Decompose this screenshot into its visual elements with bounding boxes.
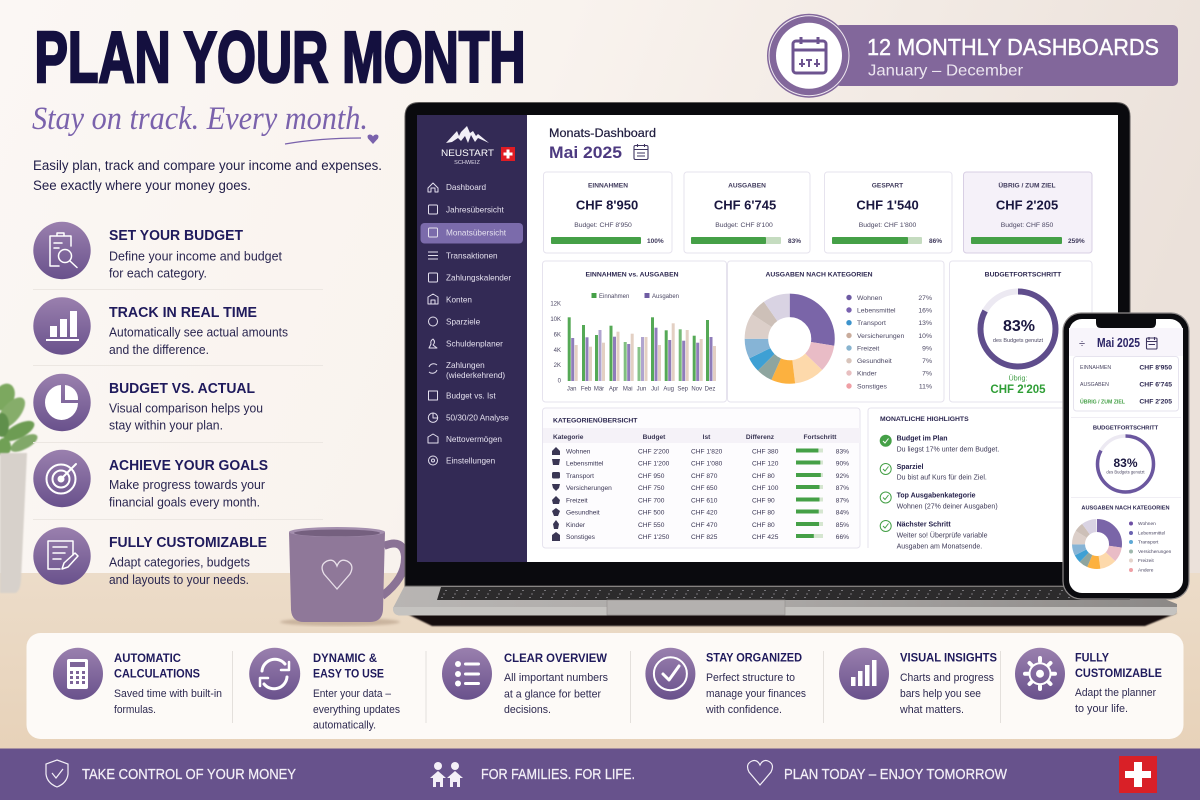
- nav items: Einstellungen: [446, 456, 496, 466]
- benefit: visual insights: Charts and progress: [900, 672, 994, 684]
- highlight: budget im plan: [880, 435, 999, 454]
- feature: budget vs actual: Visual comparison helps you: [109, 402, 263, 416]
- table rows: Transport: [566, 473, 594, 480]
- table rows: CHF 870: [691, 473, 718, 480]
- KPI card: Uebrig: ÜBRIG / ZUM ZIEL: [998, 180, 1056, 190]
- table rows: Freizeit: [566, 498, 588, 504]
- table header: [543, 428, 860, 443]
- nav items: Monatsübersicht: [446, 229, 507, 238]
- nav items: Schuldenplaner: [446, 340, 503, 348]
- logo: [441, 126, 515, 166]
- highlight: budget im plan: Du liegst 17% unter dem Budget.: [897, 446, 999, 454]
- legend: [592, 293, 679, 300]
- donut legend: 7%: [922, 358, 932, 365]
- icon: heart: [748, 760, 772, 785]
- feature: set your budget: [33, 222, 283, 280]
- KPI card: Einnahmen: EINNAHMEN: [588, 182, 628, 190]
- sidebar: [417, 115, 527, 562]
- footer band: [0, 748, 1200, 800]
- phone budget ring: des Budgets genutzt: [1106, 470, 1145, 474]
- benefit: dynamic and easy to use: [249, 648, 400, 732]
- feature: budget vs actual: [33, 374, 263, 432]
- panel: monthly highlights: [868, 408, 1065, 550]
- highlight: sparziel: Du bist auf Kurs für dein Ziel.: [897, 474, 987, 482]
- table rows: CHF 550: [638, 522, 665, 529]
- axis labels: 6K: [554, 332, 561, 338]
- divider: [630, 651, 631, 723]
- panel: category table: KATEGORIENÜBERSICHT: [553, 416, 638, 424]
- intro text: [33, 158, 382, 193]
- mug: [280, 527, 405, 626]
- benefit: dynamic and easy to use: DYNAMIC &: [313, 651, 377, 665]
- phone donut legend: Lebensmittel: [1138, 531, 1165, 537]
- benefit: clear overview: [442, 648, 608, 716]
- bottom benefits panel: [26, 633, 1184, 739]
- phone donut legend: Wohnen: [1138, 521, 1156, 527]
- axis labels: 10K: [550, 317, 561, 323]
- highlight: top ausgabenkategorie: [880, 492, 998, 510]
- KPI card: Ausgaben: AUSGABEN: [728, 182, 766, 190]
- table rows: 87%: [836, 485, 849, 492]
- KPI card: Ausgaben: 83%: [788, 238, 801, 245]
- legend: Ausgaben: [652, 294, 679, 300]
- benefit: fully customizable: FULLY: [1075, 650, 1109, 664]
- benefit: clear overview: CLEAR OVERVIEW: [504, 651, 608, 665]
- benefit: fully customizable: [1015, 648, 1162, 715]
- panel: bar chart income vs expenses: [542, 261, 726, 402]
- phone header: [1069, 328, 1183, 356]
- benefit: stay organized: manage your finances: [706, 688, 806, 700]
- phone donut legend: Transport: [1138, 540, 1159, 546]
- donut legend: 11%: [919, 384, 932, 390]
- nav items: (wiederkehrend): [446, 371, 505, 380]
- feature: set your budget: for each category.: [109, 266, 207, 280]
- feature: achieve your goals: ACHIEVE YOUR GOALS: [109, 458, 268, 474]
- table rows: Sonstiges: [566, 534, 596, 541]
- table rows: 87%: [836, 498, 849, 504]
- table header: Fortschritt: [804, 434, 837, 441]
- highlight: naechster schritt: Ausgaben am Monatsende.: [897, 544, 982, 550]
- table rows: CHF 1'820: [691, 448, 723, 456]
- phone: [1063, 313, 1189, 599]
- panel: budget progress ring: Übrig:: [1009, 374, 1027, 382]
- table rows: Kinder: [566, 522, 586, 529]
- feature: achieve your goals: Make progress towards your: [109, 478, 265, 492]
- divider: [33, 365, 323, 366]
- donut legend: Wohnen: [857, 295, 882, 302]
- panel: expenses by category donut: [728, 261, 944, 402]
- donut legend: Transport: [857, 320, 886, 327]
- donut legend: Gesundheit: [857, 358, 892, 365]
- feature: budget vs actual: BUDGET VS. ACTUAL: [109, 381, 255, 397]
- benefit: clear overview: All important numbers: [504, 672, 608, 684]
- bars: [568, 317, 716, 381]
- phone summary card: [1074, 356, 1178, 411]
- donut legend: Kinder: [857, 370, 877, 378]
- highlight: top ausgabenkategorie: Top Ausgabenkategorie: [897, 492, 976, 500]
- highlight: sparziel: Sparziel: [897, 464, 923, 471]
- icon: children: [430, 762, 463, 787]
- divider: [33, 442, 323, 443]
- icon: swiss flag: [1119, 756, 1157, 793]
- feature: budget vs actual: stay within your plan.: [109, 418, 223, 432]
- footer text: families: FOR FAMILIES. FOR LIFE.: [481, 767, 635, 783]
- divider: [33, 519, 323, 520]
- phone donut legend: Versicherungen: [1138, 549, 1172, 555]
- donut legend: 13%: [918, 320, 932, 327]
- icon: calendar: [793, 37, 826, 73]
- donut chart: [756, 305, 823, 372]
- KPI card: Einnahmen: Budget: CHF 8'950: [574, 222, 632, 229]
- axis labels: Apr: [609, 386, 618, 392]
- nav items: Konten: [446, 296, 472, 304]
- table rows: CHF 825: [691, 534, 718, 541]
- benefit: dynamic and easy to use: automatically.: [313, 720, 376, 732]
- axis labels: Mär: [594, 386, 604, 392]
- benefit: clear overview: at a glance for better: [504, 688, 601, 700]
- table header: Ist: [703, 434, 711, 441]
- table rows: Gesundheit: [566, 510, 600, 516]
- table rows: CHF 610: [691, 498, 718, 504]
- KPI card: Ausgaben: Budget: CHF 8'100: [715, 222, 773, 229]
- axis labels: Mai: [623, 386, 633, 392]
- phone donut legend: [1129, 521, 1172, 574]
- feature: fully customizable: [33, 527, 267, 587]
- intro text: See exactly where your money goes.: [33, 178, 251, 193]
- nav items: Budget vs. Ist: [446, 392, 496, 400]
- KPI card: Einnahmen: [544, 172, 672, 253]
- icon: shield: [46, 760, 68, 787]
- title: PLAN YOUR MONTH: [34, 18, 526, 98]
- logo: SCHWEIZ: [454, 160, 480, 166]
- divider: [33, 289, 323, 290]
- highlight: naechster schritt: Weiter so! Überprüfe variable: [897, 532, 988, 540]
- panel: budget progress ring: des Budgets genutzt: [993, 338, 1044, 344]
- panel: budget progress ring: CHF 2'205: [990, 384, 1046, 396]
- KPI card: Gespart: 86%: [929, 238, 942, 245]
- panel: monthly highlights: MONATLICHE HIGHLIGHTS: [880, 416, 969, 423]
- benefit: automatic calculations: CALCULATIONS: [114, 666, 200, 680]
- donut legend: 7%: [922, 370, 932, 378]
- table rows: CHF 1'250: [638, 534, 670, 541]
- table rows: Lebensmittel: [566, 460, 604, 468]
- feature: track in real time: TRACK IN REAL TIME: [109, 305, 257, 321]
- donut legend: 27%: [918, 295, 932, 302]
- axis labels: 12K: [550, 302, 561, 308]
- table rows: CHF 425: [752, 534, 779, 541]
- feature: fully customizable: FULLY CUSTOMIZABLE: [109, 535, 267, 551]
- table rows: CHF 1'080: [691, 460, 723, 468]
- phone category donut: AUSGABEN NACH KATEGORIEN: [1081, 506, 1170, 512]
- benefit: fully customizable: to your life.: [1075, 703, 1128, 715]
- badge: 12 monthly dashboards: 12 MONTHLY DASHBOARDS: [867, 34, 1159, 60]
- benefit: visual insights: VISUAL INSIGHTS: [900, 650, 997, 664]
- KPI card: Gespart: [824, 172, 952, 253]
- intro text: Easily plan, track and compare your income and expenses.: [33, 158, 382, 173]
- icon: small calendar: [634, 144, 648, 160]
- table rows: 66%: [836, 534, 849, 541]
- feature list: [33, 222, 323, 587]
- table rows: CHF 750: [638, 485, 665, 492]
- benefit: visual insights: [839, 648, 997, 716]
- feature: fully customizable: and layouts to your needs.: [109, 573, 249, 587]
- KPI card: Uebrig: Budget: CHF 850: [1001, 222, 1053, 229]
- benefit: visual insights: what matters.: [899, 704, 964, 716]
- benefit: automatic calculations: [53, 648, 222, 716]
- dashboard heading: Mai 2025: [549, 143, 622, 162]
- KPI card: Gespart: GESPART: [872, 182, 903, 190]
- phone budget ring: 83%: [1113, 456, 1138, 470]
- table rows: 85%: [836, 522, 849, 529]
- nav items: Transaktionen: [446, 252, 498, 260]
- phone summary card: EINNAHMEN: [1080, 365, 1111, 371]
- phone donut legend: Freizeit: [1138, 558, 1154, 564]
- screen: [417, 115, 1118, 562]
- nav items: Dashboard: [446, 183, 487, 192]
- KPI card: Ausgaben: CHF 6'745: [714, 198, 776, 212]
- donut legend: 10%: [918, 333, 932, 340]
- panel: expenses by category donut: AUSGABEN NACH KATEGORIEN: [765, 272, 873, 278]
- icon: heart on mug: [322, 560, 352, 589]
- axis labels: 2K: [554, 363, 561, 369]
- panel: budget progress ring: [950, 261, 1092, 402]
- benefit: visual insights: bars help you see: [900, 688, 981, 700]
- feature: set your budget: Define your income and budget: [109, 250, 283, 264]
- active nav highlight: [420, 223, 523, 244]
- table header: Differenz: [746, 434, 775, 441]
- KPI card: Uebrig: CHF 2'205: [996, 198, 1058, 212]
- table header: Kategorie: [553, 434, 584, 441]
- phone header: ÷: [1079, 338, 1085, 350]
- feature: fully customizable: Adapt categories, budgets: [109, 556, 250, 570]
- KPI card: Uebrig: [964, 172, 1092, 253]
- benefit: stay organized: with confidence.: [705, 704, 782, 716]
- table rows: CHF 650: [691, 485, 718, 492]
- highlight: sparziel: [880, 464, 987, 482]
- donut legend: 16%: [918, 308, 932, 314]
- table header: Budget: [643, 434, 666, 441]
- subtitle script with underline and heart: Stay on track. Every month.: [32, 101, 368, 137]
- table rows: CHF 100: [752, 485, 779, 492]
- axis labels: Aug: [663, 386, 674, 392]
- table rows: 90%: [836, 460, 849, 468]
- phone summary card: CHF 6'745: [1139, 382, 1172, 388]
- laptop lid: [405, 102, 1130, 586]
- phone budget ring: [1071, 417, 1181, 492]
- nav items: 50/30/20 Analyse: [446, 414, 509, 423]
- dashboard heading: Monats-Dashboard: [549, 128, 656, 140]
- badge: 12 monthly dashboards: January – December: [868, 62, 1024, 80]
- divider: [1000, 651, 1001, 723]
- table rows: CHF 380: [752, 448, 779, 456]
- benefit: automatic calculations: AUTOMATIC: [114, 651, 181, 665]
- divider: [232, 651, 233, 723]
- dashboard heading: [549, 128, 656, 162]
- axis labels: Feb: [581, 386, 592, 392]
- KPI card: Gespart: Budget: CHF 1'800: [859, 222, 917, 229]
- donut legend: Versicherungen: [857, 333, 904, 340]
- panel: budget progress ring: 83%: [1003, 318, 1035, 335]
- table rows: CHF 90: [752, 498, 775, 504]
- donut legend: Lebensmittel: [857, 308, 896, 314]
- highlight: top ausgabenkategorie: Wohnen (27% deiner Ausgaben): [897, 504, 998, 510]
- panel: category table: [542, 408, 860, 548]
- feature: achieve your goals: financial goals every month.: [109, 496, 260, 510]
- feature: track in real time: and the difference.: [109, 343, 209, 357]
- table rows: [552, 447, 849, 541]
- laptop base: [393, 585, 1177, 626]
- donut legend: [846, 295, 932, 390]
- nav items: [428, 183, 511, 466]
- KPI card: Ausgaben: [684, 172, 810, 253]
- panel: bar chart income vs expenses: EINNAHMEN vs. AUSGABEN: [585, 272, 679, 278]
- highlight: naechster schritt: [880, 520, 988, 550]
- table rows: CHF 80: [752, 522, 775, 529]
- benefit: fully customizable: CUSTOMIZABLE: [1075, 666, 1162, 680]
- axis labels: Jul: [651, 386, 659, 392]
- feature: set your budget: SET YOUR BUDGET: [109, 228, 243, 244]
- nav items: Zahlungskalender: [446, 274, 511, 283]
- phone summary card: ÜBRIG / ZUM ZIEL: [1080, 398, 1126, 406]
- benefit: stay organized: [645, 648, 806, 716]
- phone summary card: CHF 8'950: [1139, 364, 1172, 372]
- table rows: CHF 2'200: [638, 448, 670, 456]
- table rows: CHF 420: [691, 510, 718, 516]
- KPI card: Gespart: CHF 1'540: [856, 198, 919, 212]
- table rows: CHF 950: [638, 473, 665, 480]
- nav items: Jahresübersicht: [446, 206, 505, 215]
- axis labels: 4K: [554, 348, 561, 354]
- highlight: naechster schritt: Nächster Schritt: [897, 522, 951, 528]
- divider: [426, 651, 427, 723]
- benefit: automatic calculations: formulas.: [114, 704, 156, 716]
- benefit: automatic calculations: Saved time with built-in: [114, 688, 222, 700]
- benefit: stay organized: STAY ORGANIZED: [706, 650, 802, 664]
- axis labels: Nov: [691, 386, 702, 392]
- axis labels: Jun: [637, 386, 646, 392]
- benefit: dynamic and easy to use: everything updates: [313, 704, 400, 716]
- table rows: CHF 1'200: [638, 460, 670, 468]
- legend: Einnahmen: [599, 294, 629, 300]
- axis labels: Dez: [705, 386, 715, 392]
- benefit: fully customizable: Adapt the planner: [1075, 687, 1156, 699]
- table rows: 83%: [836, 448, 849, 456]
- phone budget ring: BUDGETFORTSCHRITT: [1093, 426, 1159, 432]
- highlight: budget im plan: Budget im Plan: [897, 436, 948, 442]
- phone category donut: [1071, 497, 1181, 574]
- table rows: 92%: [836, 473, 849, 480]
- donut legend: Sonstiges: [857, 384, 887, 390]
- table rows: CHF 80: [752, 473, 775, 480]
- table rows: Wohnen: [566, 448, 591, 456]
- logo: NEUSTART: [441, 148, 494, 158]
- nav items: Sparziele: [446, 318, 481, 326]
- nav items: Nettovermögen: [446, 435, 502, 444]
- table rows: Versicherungen: [566, 485, 612, 492]
- laptop: [393, 102, 1177, 626]
- phone donut legend: Andere: [1138, 568, 1154, 574]
- axis labels: 0: [558, 378, 562, 384]
- panel: budget progress ring: BUDGETFORTSCHRITT: [985, 272, 1062, 278]
- axis labels: Jan: [567, 386, 577, 392]
- phone summary card: AUSGABEN: [1080, 382, 1109, 388]
- phone header: Mai 2025: [1097, 336, 1140, 350]
- nav items: Zahlungen: [446, 361, 485, 370]
- plant in pot: [0, 380, 40, 593]
- divider: [823, 651, 824, 723]
- donut legend: Freizeit: [857, 346, 879, 352]
- KPI card: Einnahmen: 100%: [647, 238, 664, 245]
- benefit: dynamic and easy to use: Enter your data –: [313, 688, 392, 700]
- table rows: CHF 120: [752, 460, 779, 468]
- feature: track in real time: Automatically see actual amounts: [109, 326, 288, 340]
- benefit: stay organized: Perfect structure to: [706, 672, 795, 684]
- donut legend: 9%: [922, 346, 932, 352]
- table rows: 84%: [836, 510, 849, 516]
- footer text: control: TAKE CONTROL OF YOUR MONEY: [82, 767, 296, 783]
- table rows: CHF 80: [752, 510, 775, 516]
- badge: 12 monthly dashboards: [767, 14, 1178, 98]
- benefit: clear overview: decisions.: [504, 704, 551, 716]
- feature: achieve your goals: [33, 450, 268, 510]
- axis labels: [550, 302, 715, 392]
- benefit: dynamic and easy to use: EASY TO USE: [313, 666, 384, 680]
- KPI card: Uebrig: 259%: [1068, 238, 1085, 245]
- footer text: plan today: PLAN TODAY – ENJOY TOMORROW: [784, 767, 1007, 783]
- table rows: CHF 470: [691, 522, 718, 529]
- KPI card: Einnahmen: CHF 8'950: [576, 198, 638, 212]
- table rows: CHF 500: [638, 510, 665, 516]
- feature: track in real time: [33, 297, 288, 357]
- table rows: CHF 700: [638, 498, 665, 504]
- axis labels: Sep: [677, 386, 689, 392]
- phone summary card: CHF 2'205: [1139, 398, 1172, 406]
